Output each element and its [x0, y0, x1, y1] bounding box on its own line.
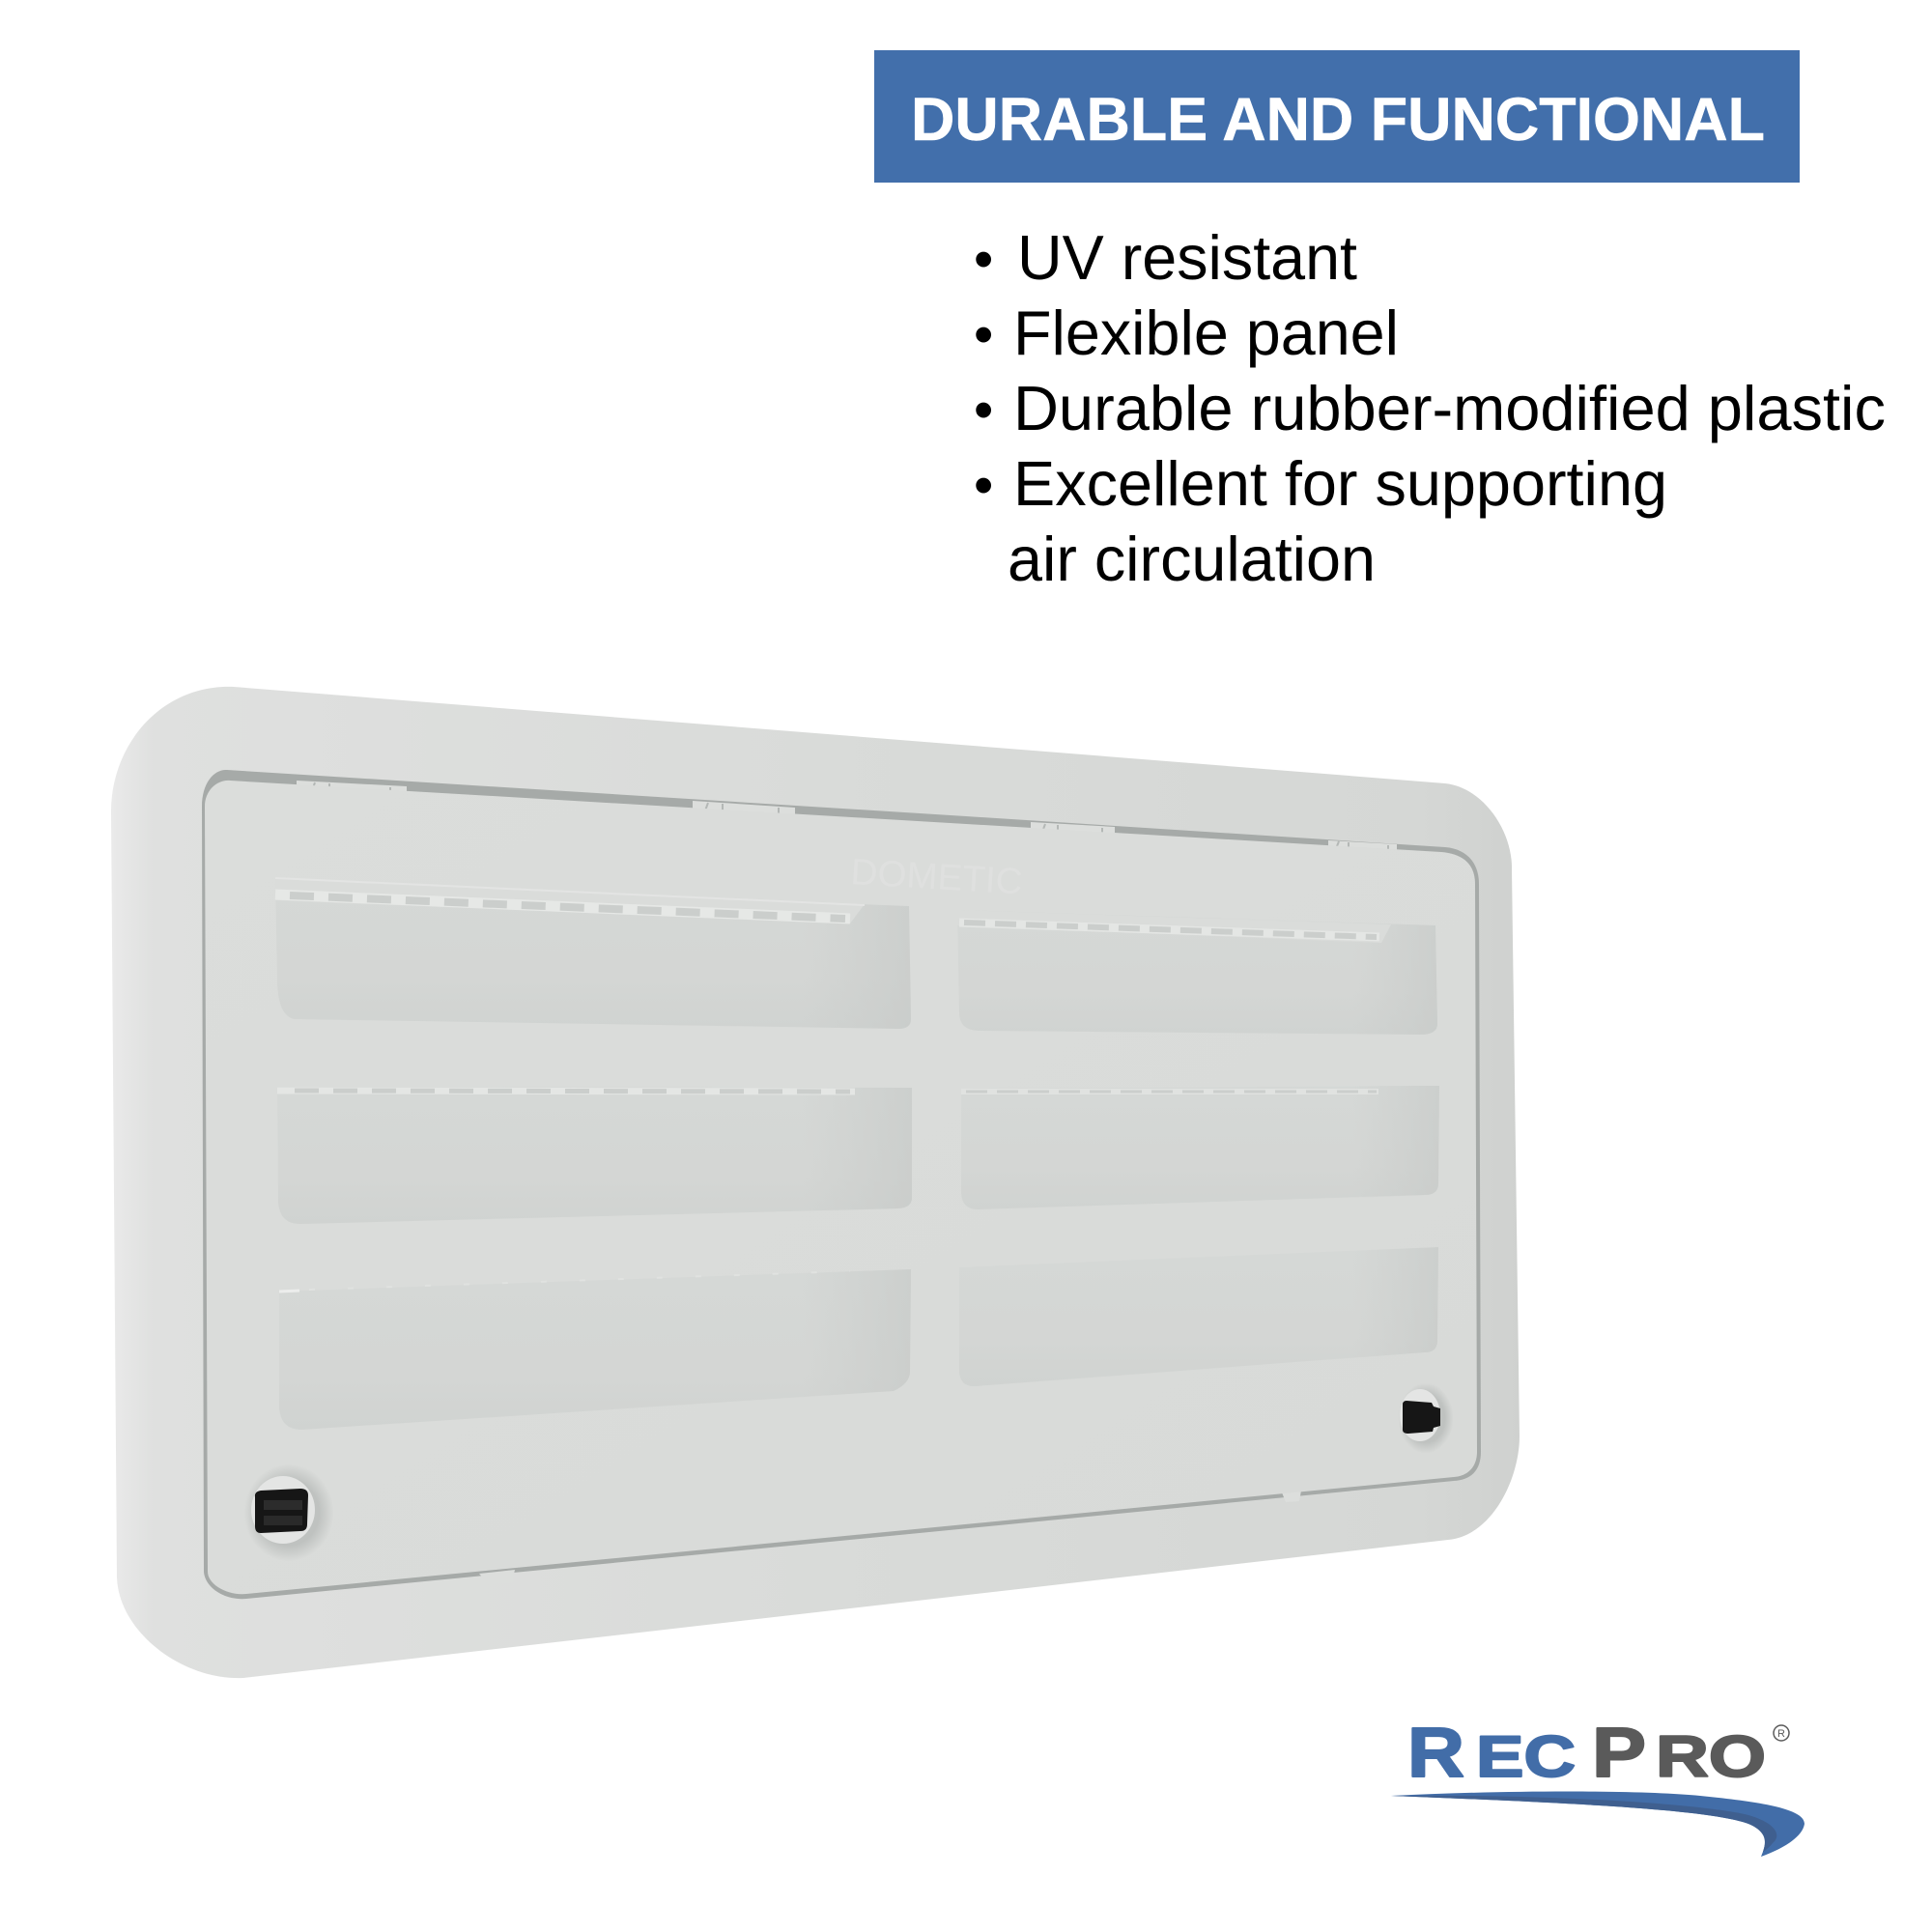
- vent slot: upper right: [957, 910, 1437, 1035]
- product: white vent door: [111, 687, 1520, 1678]
- groove clip ticks: [311, 782, 1388, 855]
- heading banner: [874, 50, 1800, 183]
- feature bullet list: UV resistant: [1017, 222, 1357, 293]
- feature bullet list: air circulation: [1008, 524, 1376, 594]
- wordmark: RO: [1656, 1724, 1766, 1789]
- door panel: [205, 781, 1477, 1594]
- latch: lower right: [1398, 1382, 1454, 1454]
- latch: lower left: [244, 1464, 333, 1561]
- feature bullet list: •: [974, 454, 993, 517]
- vent slot: upper left: [275, 878, 911, 1029]
- feature bullet list: Flexible panel: [1013, 298, 1399, 368]
- feature bullet list: [974, 222, 1886, 594]
- RecPro logo: [1391, 1715, 1804, 1857]
- feature bullet list: Excellent for supporting: [1013, 448, 1667, 519]
- vent slot: lower left: [279, 1269, 911, 1430]
- outer frame: [111, 687, 1520, 1678]
- vent slot: lower right: [959, 1247, 1438, 1386]
- vent slot: middle left: [277, 1087, 912, 1224]
- wordmark: EC: [1476, 1724, 1576, 1789]
- feature bullet list: •: [974, 303, 993, 366]
- registered mark: [1774, 1725, 1789, 1741]
- wordmark: P: [1592, 1715, 1646, 1792]
- wordmark: [1407, 1715, 1766, 1792]
- groove clips: [297, 781, 1397, 1584]
- swoosh: [1391, 1791, 1804, 1857]
- embossed brand mark: DOMETIC: [849, 852, 1024, 903]
- heading banner: DURABLE AND FUNCTIONAL: [911, 86, 1765, 154]
- groove around door: [202, 770, 1481, 1599]
- feature bullet list: •: [974, 228, 993, 291]
- wordmark: R: [1407, 1715, 1464, 1792]
- registered mark: R: [1777, 1728, 1785, 1740]
- feature bullet list: Durable rubber-modified plastic: [1013, 373, 1886, 443]
- feature bullet list: •: [974, 379, 993, 441]
- vent slot: middle right: [961, 1086, 1439, 1209]
